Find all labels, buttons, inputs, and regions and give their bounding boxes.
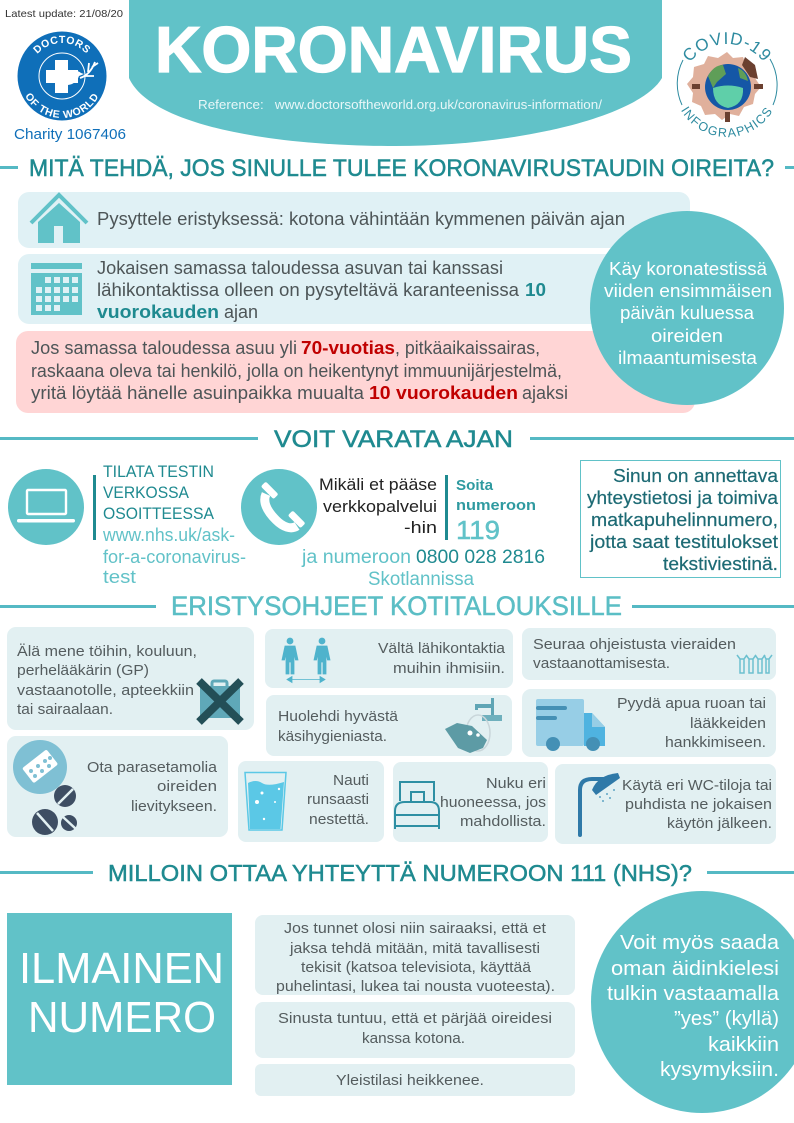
icon: shower (580, 773, 620, 835)
callout: interpreter (591, 891, 794, 1113)
panel: free number: ILMAINEN (19, 944, 224, 993)
heading: household isolation guidance (0, 591, 794, 621)
panel: vulnerable household members: 10 vuorokauden (369, 383, 518, 403)
heading: book a test (0, 426, 794, 453)
panel: cannot cope: kanssa kotona. (362, 1030, 465, 1047)
phone text: Soita (456, 477, 494, 494)
callout: interpreter: Voit myös saada (620, 931, 780, 954)
icon: pills (13, 740, 77, 835)
panel: hand hygiene (266, 695, 512, 756)
panel: fluids (238, 761, 384, 842)
heading: when to call 111: MILLOIN OTTAA YHTEYTTÄ NUMEROON 111 (NHS)? (108, 860, 692, 886)
phone text: Mikäli et pääse (319, 476, 437, 494)
panel: separate room: mahdollista. (460, 813, 546, 830)
callout: contact details: Sinun on annettava (613, 466, 779, 486)
heading: household isolation guidance: ERISTYSOHJEET KOTITALOUKSILLE (171, 591, 622, 621)
panel: stay home: perhelääkärin (GP) (17, 662, 149, 679)
panel: separate room: Nuku eri (486, 775, 546, 792)
icon: two people with arrow (282, 638, 330, 682)
order online text: test (103, 567, 136, 587)
panel: vulnerable household members: 70-vuotias (301, 338, 395, 358)
logo: Doctors of the World: OF THE WORLD (26, 93, 98, 118)
panel: too ill: puhelintasi, lukea tai nousta vuoteesta). (276, 978, 555, 995)
panel: too ill (255, 915, 575, 995)
phone text: numeroon (456, 497, 536, 514)
callout: contact details (580, 460, 780, 578)
panel: vulnerable household members: , pitkäaikaissairas, (395, 338, 540, 358)
title banner (129, 0, 662, 146)
panel: stay home: vastaanotolle, apteekkiin (17, 682, 194, 699)
panel: stay home: Älä mene töihin, kouluun, (17, 643, 197, 660)
panel: fluids: Nauti (333, 772, 369, 789)
panel: cannot cope: Sinusta tuntuu, että et pärjää oireidesi (278, 1010, 552, 1027)
panel: too ill: Jos tunnet olosi niin sairaaksi, että et (284, 920, 547, 937)
panel: distancing (265, 629, 513, 688)
callout: interpreter: kysymyksiin. (660, 1058, 779, 1081)
phone text: ja numeroon (301, 547, 411, 568)
panel: vulnerable household members: raskaana oleva tai henkilö, jolla on heikentynyt immuunijärjestelmä, (31, 361, 562, 381)
phone text (301, 475, 545, 590)
panel: free number (7, 913, 232, 1085)
panel: free number: NUMERO (28, 993, 216, 1042)
phone text: verkkopalvelui (323, 498, 437, 516)
panel: fluids: nestettä. (309, 811, 369, 828)
quarantine text: ajan (224, 302, 258, 322)
panel: distancing: Vältä lähikontaktia (378, 640, 506, 657)
title: KORONAVIRUS (155, 13, 632, 86)
quarantine text: Jokaisen samassa taloudessa asuvan tai kanssasi (97, 258, 503, 278)
badge: COVID-19 infographics (676, 32, 778, 138)
panel: visitors: vastaanottamisesta. (533, 655, 670, 672)
update date: Latest update: 21/08/20 (5, 8, 123, 20)
callout: get tested: oireiden (651, 326, 723, 346)
panel: vulnerable household members: ajaksi (522, 383, 568, 403)
icon: bed (395, 782, 439, 829)
panel: quarantine (18, 254, 690, 324)
order online text: VERKOSSA (103, 484, 189, 502)
order online text: TILATA TESTIN (103, 463, 214, 481)
logo: Doctors of the World: DOCTORS (32, 36, 90, 54)
icon: house (31, 195, 87, 243)
panel: bathroom: Käytä eri WC-tiloja tai (622, 777, 772, 794)
callout: interpreter: kaikkiin (708, 1033, 779, 1056)
panel: fluids: runsaasti (307, 791, 369, 808)
order online text: OSOITTEESSA (103, 505, 214, 523)
panel: bathroom: käytön jälkeen. (667, 815, 772, 832)
heading: book a test: VOIT VARATA AJAN (274, 426, 513, 453)
panel: bathroom: puhdista ne jokaisen (625, 796, 772, 813)
phone text: -hin (404, 519, 437, 537)
callout: contact details: tekstiviestinä. (663, 554, 778, 574)
quarantine text (97, 258, 546, 322)
order online text: for-a-coronavirus- (103, 547, 246, 567)
icon: laptop (8, 469, 84, 545)
isolate text: Pysyttele eristyksessä: kotona vähintään kymmenen päivän ajan (97, 209, 625, 229)
charity number: Charity 1067406 (14, 127, 126, 143)
callout: contact details: yhteystietosi ja toimiva (587, 488, 779, 508)
panel: separate room (393, 762, 548, 842)
panel: separate room: huoneessa, jos (440, 794, 546, 811)
icon: group of people (737, 655, 772, 673)
panel: distancing: muihin ihmisiin. (393, 660, 505, 677)
panel: hand hygiene: Huolehdi hyvästä (278, 708, 399, 725)
panel: visitors: Seuraa ohjeistusta vieraiden (533, 636, 736, 653)
icon: glass of water (245, 772, 286, 830)
panel: condition worsens: Yleistilasi heikkenee. (336, 1072, 484, 1089)
panel: cannot cope (255, 1002, 575, 1058)
callout: interpreter: ”yes” (kyllä) (674, 1007, 779, 1030)
callout: interpreter: oman äidinkielesi (611, 957, 779, 980)
icon: crossed briefcase (199, 681, 241, 722)
panel: paracetamol (7, 736, 228, 837)
panel: paracetamol: Ota parasetamolia (87, 759, 218, 776)
callout: get tested: ilmaantumisesta (618, 348, 758, 368)
quarantine text: 10 (525, 280, 546, 300)
panel: bathroom (555, 764, 776, 844)
callout: get tested: Käy koronatestissä (609, 259, 768, 279)
panel: paracetamol: lievitykseen. (131, 798, 217, 815)
heading: what to do: MITÄ TEHDÄ, JOS SINULLE TULEE KORONAVIRUSTAUDIN OIREITA? (29, 155, 774, 182)
icon: calendar (31, 263, 82, 315)
panel: hand hygiene: käsihygieniasta. (278, 728, 387, 745)
callout: get tested: viiden ensimmäisen (604, 281, 772, 301)
panel: vulnerable household members: yritä löytää hänelle asuinpaikka muualta (31, 383, 365, 403)
order online text: www.nhs.uk/ask- (102, 525, 235, 545)
panel: vulnerable household members: Jos samassa taloudessa asuu yli (31, 338, 297, 358)
panel: delivery help: lääkkeiden (690, 715, 766, 732)
quarantine text: lähikontaktissa olleen on pysyteltävä karanteenissa (97, 280, 520, 300)
badge: COVID-19 infographics: INFOGRAPHICS (681, 106, 772, 138)
callout: get tested: päivän kuluessa (620, 303, 755, 323)
order online text (93, 463, 246, 587)
phone text: Skotlannissa (368, 569, 474, 590)
panel: too ill: tekisit (katsoa televisiota, käyttää (301, 959, 532, 976)
panel: delivery help (522, 689, 776, 757)
icon: delivery truck (536, 699, 605, 751)
panel: stay home: tai sairaalaan. (17, 701, 113, 718)
panel: isolate (18, 192, 690, 248)
panel: paracetamol: oireiden (157, 778, 217, 795)
phone text: 0800 028 2816 (416, 547, 545, 568)
icon: washing hands (445, 698, 502, 753)
badge: COVID-19 infographics: COVID-19 (684, 32, 770, 60)
panel: vulnerable household members (16, 331, 695, 413)
callout: contact details: jotta saat testitulokset (589, 532, 778, 552)
callout: interpreter: tulkin vastaamalla (607, 982, 780, 1005)
reference: Reference: www.doctorsoftheworld.org.uk/coronavirus-information/ (198, 98, 603, 112)
icon: phone (241, 469, 317, 545)
panel: delivery help: hankkimiseen. (665, 734, 766, 751)
callout: get tested (590, 211, 784, 405)
phone text: 119 (456, 515, 500, 545)
callout: contact details: matkapuhelinnumero, (591, 510, 778, 530)
logo: Doctors of the World (18, 32, 106, 120)
panel: delivery help: Pyydä apua ruoan tai (617, 695, 766, 712)
panel: stay home (7, 627, 254, 730)
panel: visitors (522, 628, 776, 680)
panel: condition worsens (255, 1064, 575, 1096)
quarantine text: vuorokauden (97, 302, 219, 322)
panel: too ill: jaksa tehdä mitään, mitä tavallisesti (289, 940, 540, 957)
